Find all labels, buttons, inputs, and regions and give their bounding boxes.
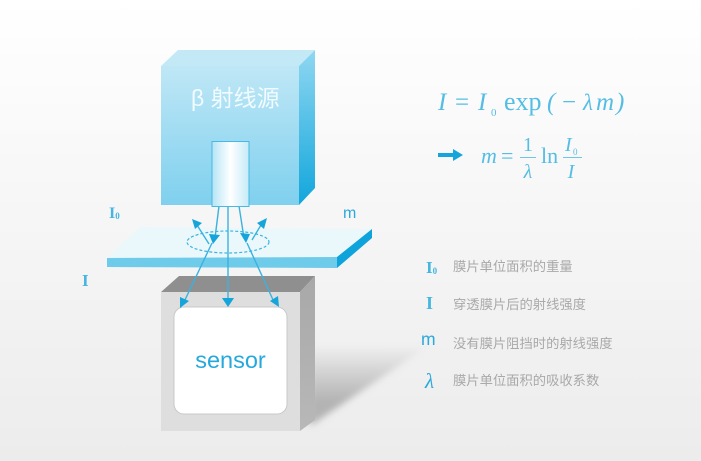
legend row: m: 没有膜片阻挡时的射线强度 xyxy=(453,336,613,351)
formula: exponential: = xyxy=(455,89,469,116)
formula: solved for m: 1 xyxy=(523,134,533,156)
formula: exponential: λ xyxy=(582,90,593,115)
sensor label: sensor xyxy=(195,347,266,373)
legend row: I: I xyxy=(426,293,433,313)
panel: radiation source box xyxy=(161,50,315,205)
formula: exponential: m xyxy=(596,89,614,116)
film area ellipse xyxy=(187,231,269,253)
legend row: I0 xyxy=(426,258,573,277)
source window xyxy=(212,142,249,206)
formula: exponential: ) xyxy=(614,89,624,116)
legend row: lambda: 膜片单位面积的吸收系数 xyxy=(453,373,599,388)
formula: exponential: 0 xyxy=(491,107,497,119)
formula: solved for m: λ xyxy=(523,161,533,183)
formula: solved for m: m xyxy=(481,143,497,168)
label: I on diagram: I xyxy=(82,271,89,290)
formula: solved for m xyxy=(481,134,582,183)
panel: sensor block xyxy=(161,276,428,431)
label: I0 on diagram: 0 xyxy=(115,211,120,221)
formula: solved for m: 0 xyxy=(573,147,578,157)
label: I0 on diagram: I xyxy=(109,205,115,222)
formula: solved for m: ln xyxy=(541,143,558,168)
formula: exponential: ( xyxy=(547,89,557,116)
panel: film sheet xyxy=(107,227,372,268)
formula: exponential: − xyxy=(562,89,576,116)
formula: exponential: I xyxy=(477,89,488,116)
legend row: m xyxy=(421,329,613,351)
formula: exponential: I xyxy=(437,89,448,116)
legend row: I0: I xyxy=(426,258,433,277)
legend row: I xyxy=(426,293,586,313)
formula: exponential: exp xyxy=(504,87,542,116)
beam arrows xyxy=(180,206,279,308)
arrow: implies xyxy=(438,149,463,161)
formula: solved for m: I xyxy=(567,161,576,183)
legend row: lambda xyxy=(424,369,599,393)
label: m on diagram: m xyxy=(343,205,356,222)
legend row: I0: 膜片单位面积的重量 xyxy=(453,259,573,274)
legend row: m: m xyxy=(421,329,436,349)
source label: β 射线源 xyxy=(191,85,280,111)
formula: solved for m: = xyxy=(501,143,513,168)
legend xyxy=(421,258,613,393)
legend row: I: 穿透膜片后的射线强度 xyxy=(453,297,586,312)
formula: solved for m: I xyxy=(564,134,573,156)
legend row: lambda: λ xyxy=(424,369,434,393)
formula: exponential xyxy=(437,87,624,119)
legend row: I0: 0 xyxy=(433,266,438,276)
